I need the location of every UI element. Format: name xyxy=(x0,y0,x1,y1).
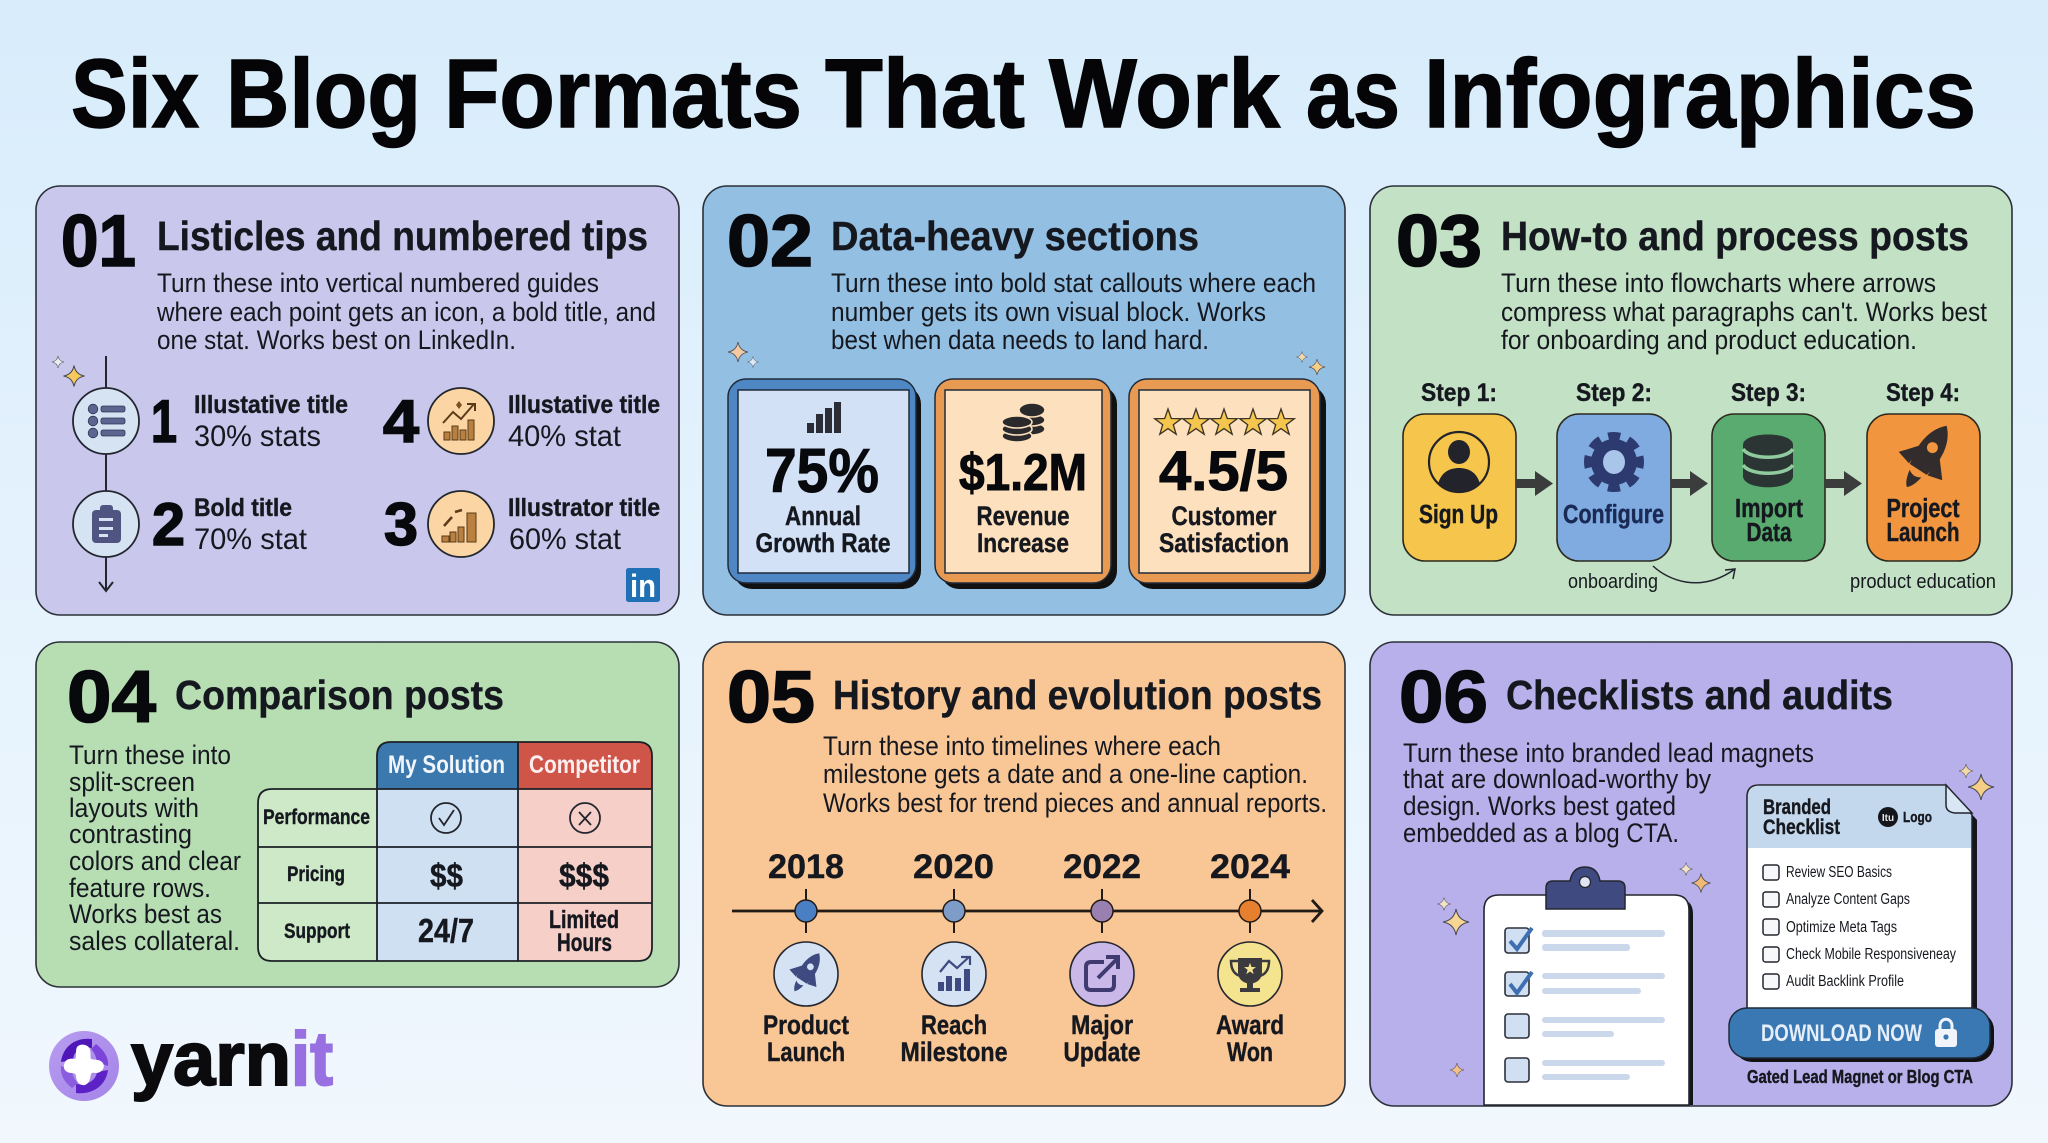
body text: where each point gets an icon, a bold title, and xyxy=(156,297,656,327)
body text: sales collateral. xyxy=(69,926,240,956)
step labels: Step 4: xyxy=(1886,379,1960,407)
title: Infographics xyxy=(1424,39,1976,148)
sparkles xyxy=(52,356,84,386)
tip 3: 3 xyxy=(384,491,418,558)
branded checklist document xyxy=(1747,785,1977,1012)
stat card: 75% xyxy=(728,379,921,589)
stat card: 75%: 75% xyxy=(765,437,879,506)
body text: design. Works best gated xyxy=(1403,791,1676,821)
tip 2: 70% stat xyxy=(194,523,308,556)
comparison table: Pricing xyxy=(287,863,345,886)
stat card: 4.5/5: 4.5/5 xyxy=(1159,439,1288,502)
step labels: Step 2: xyxy=(1576,379,1652,407)
tip 4: 4 xyxy=(383,388,420,455)
stat card: $1.2M: Increase xyxy=(977,528,1069,558)
heading: Listicles and numbered tips xyxy=(157,213,648,259)
step box: project launch: Launch xyxy=(1886,519,1960,547)
icon: check xyxy=(431,803,461,833)
icon: coins xyxy=(1002,403,1045,442)
title: as xyxy=(1306,39,1400,148)
tip 2 xyxy=(152,491,308,558)
heading: Data-heavy sections xyxy=(831,213,1199,259)
years xyxy=(768,848,1290,886)
logo mark xyxy=(1878,807,1932,827)
branded checklist document: Branded xyxy=(1763,795,1831,819)
branded checklist document: Audit Backlink Profile xyxy=(1786,973,1904,990)
milestone labels: Launch xyxy=(767,1037,845,1067)
tip 2: 2 xyxy=(152,491,185,558)
logo mark: Logo xyxy=(1903,809,1932,826)
sparkles xyxy=(728,342,1325,375)
title: That xyxy=(825,39,1025,148)
panel: 02 data-heavy xyxy=(703,186,1345,615)
step box: project launch: Project xyxy=(1886,495,1960,523)
body text: that are download-worthy by xyxy=(1403,764,1712,794)
step box: import data: Import xyxy=(1735,495,1803,523)
body text xyxy=(831,268,1316,355)
years: 2018 xyxy=(768,848,844,886)
step box: import data: Data xyxy=(1746,519,1792,547)
step box: configure xyxy=(1557,414,1671,561)
comparison table: Support xyxy=(284,920,350,943)
arrow xyxy=(1825,471,1862,496)
heading: Comparison posts xyxy=(175,672,504,718)
panel: 06 checklists xyxy=(1370,642,2012,1106)
panel: 05 history xyxy=(703,642,1345,1106)
branded checklist document: Check Mobile Responsiveneay xyxy=(1786,946,1956,963)
step box: configure: Configure xyxy=(1563,501,1664,529)
comparison table xyxy=(258,742,652,961)
stat card: 75%: Annual xyxy=(785,501,861,531)
logo mark: Itu xyxy=(1882,813,1894,824)
tip 4: Illustative title xyxy=(508,391,660,419)
number 02: 02 xyxy=(727,201,813,282)
icon: cross xyxy=(570,803,600,833)
title: Work xyxy=(1049,39,1281,148)
body text: Turn these into vertical numbered guides xyxy=(157,268,599,298)
body text: Turn these into flowcharts where arrows xyxy=(1501,268,1936,298)
milestone labels: Award xyxy=(1216,1010,1284,1040)
step labels xyxy=(1421,379,1960,407)
caption: gated lead magnet: Gated Lead Magnet or Blog CTA xyxy=(1747,1067,1973,1087)
tip 1: 30% stats xyxy=(194,420,321,453)
body text xyxy=(69,740,241,956)
icon: bars xyxy=(807,402,841,433)
step box: import data xyxy=(1712,414,1825,561)
body text: Turn these into bold stat callouts where each xyxy=(831,268,1316,298)
body text xyxy=(823,731,1327,818)
comparison table: $$ xyxy=(430,857,463,894)
body text: best when data needs to land hard. xyxy=(831,325,1209,355)
body text: split-screen xyxy=(69,767,195,797)
branded checklist document: Analyze Content Gaps xyxy=(1786,891,1910,908)
milestone labels xyxy=(763,1010,1284,1067)
illustration: clipboard xyxy=(1484,867,1693,1105)
tip 3 xyxy=(384,491,660,558)
years: 2022 xyxy=(1063,848,1141,886)
heading: History and evolution posts xyxy=(833,672,1322,718)
timeline dots xyxy=(795,900,1261,922)
icon: external update xyxy=(1070,942,1134,1006)
icon: trophy xyxy=(1218,942,1282,1006)
body text: embedded as a blog CTA. xyxy=(1403,818,1679,848)
stat card: 4.5/5: Customer xyxy=(1172,501,1277,531)
caption: product education: product education xyxy=(1850,571,1996,593)
arrow xyxy=(1516,471,1553,496)
comparison table: Hours xyxy=(557,929,612,957)
title: Formats xyxy=(444,39,802,148)
step labels: Step 3: xyxy=(1731,379,1806,407)
icon: list xyxy=(73,388,139,454)
stat card: 75%: Growth Rate xyxy=(756,528,890,558)
icon: growth chart xyxy=(922,942,986,1006)
stat card: $1.2M xyxy=(935,379,1117,589)
milestone labels: Won xyxy=(1227,1037,1273,1067)
icon: clipboard xyxy=(73,491,139,557)
body text: one stat. Works best on LinkedIn. xyxy=(157,325,516,355)
years: 2020 xyxy=(913,848,994,886)
panel: 01 listicles xyxy=(36,186,679,615)
title xyxy=(71,39,1976,148)
number 03: 03 xyxy=(1396,201,1482,282)
body text: number gets its own visual block. Works xyxy=(831,297,1266,327)
milestone labels: Milestone xyxy=(900,1037,1008,1067)
body text: contrasting xyxy=(69,819,192,849)
milestone labels: Major xyxy=(1071,1010,1133,1040)
icon: stars xyxy=(1155,409,1294,434)
tip 1: Illustative title xyxy=(194,391,348,419)
milestone labels: Update xyxy=(1064,1037,1140,1067)
stat card: $1.2M: $1.2M xyxy=(959,444,1087,502)
timeline axis xyxy=(732,889,1322,933)
panel: 03 how-to xyxy=(1370,186,2012,615)
body text: Turn these into timelines where each xyxy=(823,731,1221,761)
tip 4: 40% stat xyxy=(508,420,622,453)
number 05: 05 xyxy=(727,657,815,738)
body text xyxy=(1403,738,1814,848)
icon: linkedin: in xyxy=(630,568,656,604)
body text: Works best as xyxy=(69,899,222,929)
title: Six xyxy=(71,39,199,148)
branded checklist document: Optimize Meta Tags xyxy=(1786,919,1897,936)
tip 1 xyxy=(151,388,348,455)
tip 2: Bold title xyxy=(194,494,292,522)
body text: feature rows. xyxy=(69,873,211,903)
arrow xyxy=(1671,471,1708,496)
comparison table: Performance xyxy=(263,806,370,829)
tip 1: 1 xyxy=(151,388,177,455)
number 01: 01 xyxy=(61,201,136,282)
comparison table: My Solution xyxy=(388,751,505,779)
caption: onboarding with curved arrow: onboarding xyxy=(1568,571,1658,593)
milestone labels: Reach xyxy=(921,1010,987,1040)
heading: How-to and process posts xyxy=(1501,213,1969,259)
comparison table: Competitor xyxy=(529,751,640,779)
step box: project launch xyxy=(1867,412,1980,561)
download button xyxy=(1729,1008,1994,1062)
body text xyxy=(156,268,656,355)
step labels: Step 1: xyxy=(1421,379,1497,407)
branded checklist document: Review SEO Basics xyxy=(1786,864,1892,881)
milestone labels: Product xyxy=(763,1010,849,1040)
comparison table: 24/7 xyxy=(418,912,474,949)
step box: sign up: Sign Up xyxy=(1419,501,1498,529)
step box: sign up xyxy=(1403,414,1516,561)
body text xyxy=(1501,268,1988,355)
stat card: 4.5/5: Satisfaction xyxy=(1159,528,1289,558)
body text: Turn these into xyxy=(69,740,231,770)
body text: Works best for trend pieces and annual reports. xyxy=(823,788,1327,818)
body text: layouts with xyxy=(69,793,199,823)
vertical guide line with arrow xyxy=(99,356,113,591)
body text: for onboarding and product education. xyxy=(1501,325,1917,355)
comparison table: Limited xyxy=(549,906,619,934)
tip 4 xyxy=(383,388,660,455)
stat card: $1.2M: Revenue xyxy=(976,501,1070,531)
body text: Turn these into branded lead magnets xyxy=(1403,738,1814,768)
stat card: 4.5/5 xyxy=(1129,379,1326,589)
panel: 04 comparison xyxy=(36,642,679,987)
tip 3: 60% stat xyxy=(509,523,622,556)
body text: compress what paragraphs can't. Works best xyxy=(1501,297,1988,327)
download button: DOWNLOAD NOW xyxy=(1761,1020,1922,1047)
body text: milestone gets a date and a one-line caption. xyxy=(823,759,1308,789)
title: Blog xyxy=(226,39,421,148)
logo: yarnit: it xyxy=(291,1017,333,1102)
icon: rocket xyxy=(774,942,838,1006)
logo: yarnit xyxy=(49,1017,333,1102)
number 04: 04 xyxy=(67,657,156,738)
logo: yarnit: yarn xyxy=(131,1017,291,1102)
tip 3: Illustrator title xyxy=(508,494,660,522)
years: 2024 xyxy=(1210,848,1290,886)
caption: onboarding with curved arrow xyxy=(1568,566,1735,593)
heading: Checklists and audits xyxy=(1506,672,1893,718)
number 06: 06 xyxy=(1399,657,1488,738)
icon: lock xyxy=(1935,1019,1957,1047)
branded checklist document: Checklist xyxy=(1763,815,1840,839)
comparison table: $$$ xyxy=(559,857,609,894)
body text: colors and clear xyxy=(69,846,241,876)
sparkles xyxy=(1438,764,1994,1077)
